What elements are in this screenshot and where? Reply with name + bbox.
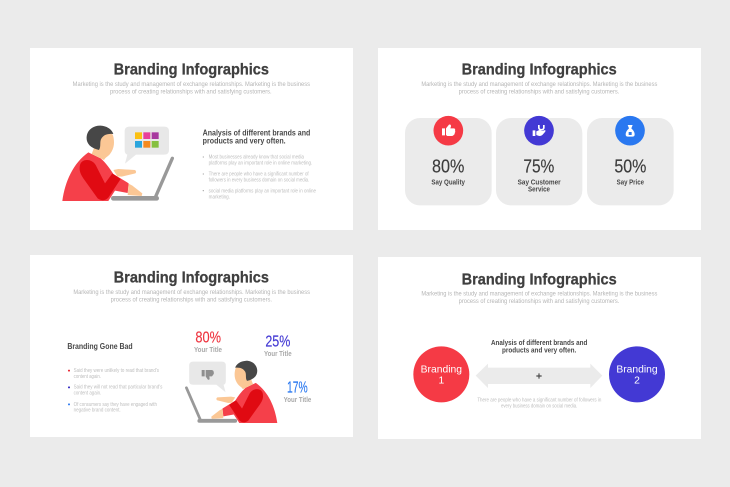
- circle: branding 1: [413, 346, 469, 402]
- subtitle: Marketing is the study and management of exchange relationships. Marketing is the business: [73, 289, 311, 296]
- panel: three statistic cards: [378, 48, 701, 230]
- bullet list: [203, 154, 316, 200]
- heading: analysis: products and very often.: [502, 346, 576, 355]
- heading: branding gone bad: Branding Gone Bad: [67, 342, 133, 351]
- card: customer service: 75%: [523, 155, 554, 176]
- illustration: person at laptop, mirrored: [186, 361, 277, 423]
- subtitle: Marketing is the study and management of exchange relationships. Marketing is the business: [421, 81, 658, 88]
- bullet list: [68, 368, 162, 414]
- bullet list: content again.: [74, 391, 102, 397]
- circle: branding 2: Branding: [616, 365, 658, 376]
- stat: 80%: 80%: [195, 329, 221, 346]
- heading: analysis: Analysis of different brands and: [203, 128, 310, 137]
- title: Branding Infographics: [114, 62, 269, 79]
- circle: branding 2: [609, 346, 665, 402]
- icon: thumbs down: [202, 370, 214, 380]
- panel: branding gone bad: [30, 255, 353, 437]
- circle: branding 2: 2: [634, 375, 640, 386]
- subtitle: process of creating relationships with and satisfying customers.: [459, 88, 619, 95]
- title: Branding Infographics: [114, 270, 269, 287]
- subtitle: process of creating relationships with and satisfying customers.: [111, 296, 272, 303]
- bullet list: There are people who have a significant number of: [209, 171, 309, 177]
- caption: [477, 398, 601, 410]
- heading: analysis: Analysis of different brands and: [491, 338, 587, 347]
- stat: 25%: Your Title: [264, 349, 292, 358]
- stat: 17%: [284, 380, 311, 404]
- card: price: [587, 116, 674, 205]
- bullet list: negative brand content.: [74, 408, 121, 414]
- stat: 80%: [194, 329, 222, 354]
- subtitle: process of creating relationships with and satisfying customers.: [459, 298, 619, 305]
- card: price: Say Price: [617, 177, 644, 186]
- card: customer service: Say Customer: [518, 177, 561, 186]
- heading: analysis: [203, 128, 310, 146]
- subtitle: Marketing is the study and management of exchange relationships. Marketing is the business: [73, 81, 311, 88]
- subtitle: [73, 289, 311, 303]
- arrow: double-headed with plus: [476, 364, 602, 388]
- heading: analysis: [491, 338, 587, 355]
- panel: branding 1 and branding 2 comparison: [378, 257, 701, 439]
- stat: 80%: Your Title: [194, 345, 222, 354]
- card: customer service: [496, 116, 582, 205]
- bullet list: platforms play an important role in online marketing.: [209, 160, 313, 166]
- subtitle: [421, 291, 658, 305]
- bullet list: Most businesses already know that social media: [209, 154, 305, 160]
- heading: analysis: products and very often.: [203, 137, 286, 146]
- subtitle: [421, 81, 658, 95]
- subtitle: process of creating relationships with and satisfying customers.: [110, 88, 272, 95]
- card: quality: Say Quality: [431, 177, 466, 186]
- caption: every business domain on social media.: [501, 404, 578, 410]
- card: customer service: Service: [528, 185, 550, 194]
- stat: 25%: 25%: [265, 334, 290, 351]
- title: Branding Infographics: [462, 271, 617, 288]
- bullet list: content again.: [74, 374, 101, 380]
- panel: person with laptop and analysis: [30, 48, 353, 230]
- subtitle: Marketing is the study and management of exchange relationships. Marketing is the business: [421, 291, 658, 298]
- circle: branding 1: Branding: [421, 365, 462, 376]
- caption: There are people who have a significant number of followers in: [477, 398, 601, 404]
- bullet list: followers in every business domain on social media.: [209, 177, 310, 183]
- illustration: person at laptop: [62, 126, 172, 201]
- circle: branding 1: 1: [438, 375, 444, 386]
- speech bubble with colour squares: [125, 127, 169, 164]
- bullet list: Said they will not read that particular brand's: [74, 385, 162, 391]
- card: quality: 80%: [432, 155, 464, 176]
- subtitle: [73, 81, 311, 95]
- title: Branding Infographics: [462, 62, 617, 79]
- bullet list: Said they were unlikely to read that brand's: [74, 368, 159, 374]
- stat: 25%: [264, 334, 292, 358]
- stat: 17%: Your Title: [284, 395, 311, 404]
- bullet list: social media platforms play an important role in online: [209, 188, 316, 194]
- stat: 17%: 17%: [287, 380, 308, 397]
- card: price: 50%: [614, 155, 646, 176]
- bullet list: marketing.: [209, 194, 230, 200]
- card: quality: [405, 116, 492, 205]
- bullet list: Of consumers say they have engaged with: [74, 402, 157, 408]
